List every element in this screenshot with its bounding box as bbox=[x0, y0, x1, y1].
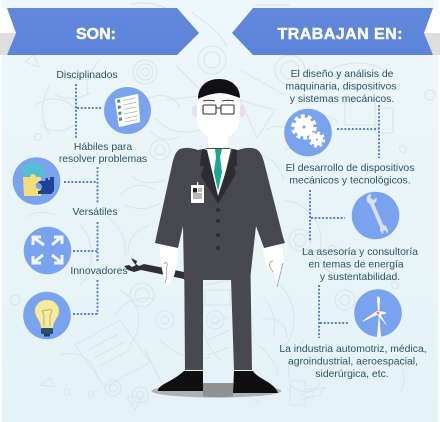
icon: wrench bbox=[352, 192, 399, 239]
face bbox=[197, 95, 240, 139]
right hand lines bbox=[270, 261, 283, 287]
jacket bbox=[155, 148, 285, 280]
wrench bbox=[124, 258, 184, 279]
text: diseño y análisis: El diseño y análisis de bbox=[291, 69, 394, 80]
ribbon: TRABAJAN EN bbox=[232, 8, 440, 55]
text: asesoría y consultoría: y sustentabilidad. bbox=[320, 272, 400, 283]
left hand bbox=[160, 245, 178, 288]
right shoe bbox=[233, 371, 278, 393]
ribbon: SON bbox=[0, 8, 199, 55]
left shoe bbox=[158, 371, 203, 391]
neck bbox=[208, 132, 228, 152]
shadow centre bbox=[203, 383, 233, 397]
text: industria: La industria automotriz, médica, bbox=[279, 344, 427, 355]
icon: wind turbine bbox=[354, 289, 402, 337]
shirt bbox=[205, 149, 231, 200]
floor shadow bbox=[152, 384, 282, 398]
text: industria: agroindustrial, aeroespacial, bbox=[288, 356, 418, 367]
text: asesoría y consultoría: La asesoría y consultoría bbox=[302, 247, 418, 258]
label: Innovadores: Innovadores bbox=[70, 266, 128, 277]
text: desarrollo de dispositivos: mecánicos y tecnológicos. bbox=[289, 175, 411, 186]
ribbon: TRABAJAN EN: TRABAJAN EN: bbox=[278, 26, 402, 43]
text: desarrollo de dispositivos: El desarrollo de dispositivos bbox=[286, 163, 414, 174]
left hand lines bbox=[164, 263, 167, 283]
label: Hábiles para resolver problemas: Hábiles para bbox=[74, 142, 132, 153]
right hand bbox=[263, 245, 284, 287]
right lapel bbox=[218, 149, 237, 204]
figure: engineer bbox=[124, 79, 285, 398]
left lapel bbox=[200, 149, 218, 204]
glasses bbox=[203, 100, 234, 114]
text: diseño y análisis: y sistemas mecánicos. bbox=[290, 94, 394, 105]
text: diseño y análisis: maquinaria, dispositivos bbox=[286, 81, 396, 92]
dotted connectors: right column bbox=[310, 105, 379, 338]
label: Disciplinados: Disciplinados bbox=[56, 70, 118, 81]
icon: arrows bbox=[24, 227, 71, 274]
text: asesoría y consultoría: en temas de energía bbox=[308, 259, 404, 270]
hair bbox=[198, 79, 240, 99]
id badge bbox=[191, 182, 204, 203]
tie bbox=[214, 149, 222, 191]
icon: puzzle bbox=[13, 157, 60, 205]
icon: light bulb bbox=[23, 292, 71, 339]
text: industria: siderúrgica, etc. bbox=[315, 369, 389, 380]
label: Hábiles para resolver problemas: resolver problemas bbox=[59, 154, 147, 165]
right ear bbox=[238, 105, 246, 117]
label: Versátiles: Versátiles bbox=[72, 207, 118, 218]
ribbon: SON: SON: bbox=[76, 26, 116, 43]
ears bbox=[192, 105, 198, 117]
buttons bbox=[216, 208, 220, 250]
icon: checklist bbox=[104, 87, 151, 134]
dotted connectors: left column bbox=[64, 84, 102, 314]
icon: gears bbox=[284, 109, 332, 156]
trousers bbox=[184, 240, 252, 370]
